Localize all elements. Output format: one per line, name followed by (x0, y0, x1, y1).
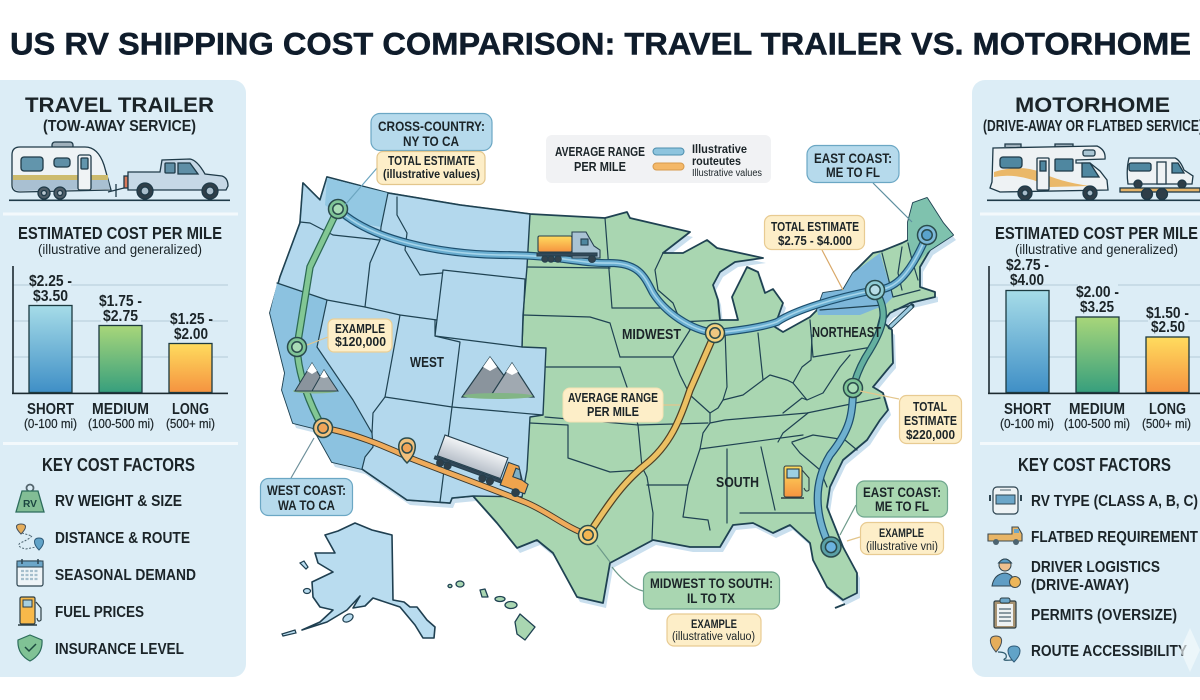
callout: midwest to south (597, 545, 780, 646)
callout: average range per mile: PER MILE (587, 405, 639, 419)
map: Florida keys (835, 604, 845, 608)
heading: estimated cost per mile: (illustrative and generalized) (38, 241, 202, 257)
heading: key cost factors: KEY COST FACTORS (1018, 455, 1171, 475)
callout: midwest to south: MIDWEST TO SOUTH: (650, 575, 773, 591)
label: NORTHEAST: NORTHEAST (812, 324, 881, 341)
bar chart: motorhome cost per mile: (0-100 mi) (1000, 417, 1054, 431)
bar chart: motorhome cost per mile: $2.50 (1151, 319, 1185, 336)
map: land fill midwest south northeast (270, 177, 953, 603)
bar chart: motorhome cost per mile (988, 257, 1200, 431)
callout: east coast south: EXAMPLE (879, 528, 924, 540)
callout: example 120,000: $120,000 (335, 334, 386, 349)
map: Alaska (302, 523, 435, 638)
callout: total estimate 220,000: TOTAL (913, 400, 947, 414)
bar chart: trailer cost per mile: (100-500 mi) (88, 417, 154, 431)
callout: cross-country: CROSS-COUNTRY: (378, 118, 485, 134)
callout: total estimate 220,000: ESTIMATE (904, 414, 957, 428)
map: New York highlight (817, 253, 893, 315)
map: Maine highlight (908, 198, 953, 260)
panel: motorhome (972, 80, 1200, 677)
bar chart: trailer cost per mile: LONG (172, 401, 209, 418)
bar chart: trailer cost per mile: (500+ mi) (166, 417, 215, 431)
bar chart: motorhome cost per mile: $1.50 - (1146, 305, 1189, 322)
map: California highlight (270, 283, 373, 469)
callout: total estimate 220,000: $220,000 (906, 428, 955, 442)
bar chart: trailer cost per mile: SHORT (27, 401, 74, 418)
callout: total estimate per mile: $2.75 - $4.000 (778, 234, 852, 248)
heading: motorhome (983, 94, 1200, 135)
legend: AVERAGE RANGE (555, 145, 645, 159)
icon: mountains west (462, 357, 534, 399)
legend: Illustrative values (692, 168, 762, 179)
callout: midwest to south: (illustrative valuo) (672, 631, 755, 643)
factor: fuel prices: FUEL PRICES (55, 604, 144, 621)
route nodes (288, 200, 936, 557)
callout: example 120,000 (307, 319, 392, 352)
factor: distance and route (16, 524, 190, 550)
title: US RV SHIPPING COST COMPARISON: TRAVEL TRAILER VS. MOTORHOME (10, 26, 1191, 62)
bar chart: motorhome cost per mile: $3.25 (1080, 299, 1114, 316)
icon: tanker truck on northern route (537, 232, 600, 262)
bar chart: motorhome cost per mile: MEDIUM (1069, 401, 1125, 418)
legend (546, 135, 771, 183)
bar chart: trailer cost per mile (12, 266, 228, 431)
icon: trailer towed by pickup (12, 142, 228, 199)
icon: fuel pump on map (781, 466, 809, 498)
icon: motorhome and van on flatbed (990, 144, 1200, 200)
map shadow (273, 182, 956, 608)
callout: east coast south: (illustrative vni) (866, 541, 938, 553)
factor: driver logistics: (DRIVE-AWAY) (1031, 577, 1129, 594)
callout: cross-country: NY TO CA (403, 133, 459, 149)
callout: west coast: WEST COAST: (267, 482, 346, 498)
heading: key cost factors: KEY COST FACTORS (42, 455, 195, 475)
callout: cross-country (345, 114, 492, 205)
legend: PER MILE (574, 160, 626, 174)
label: WEST: WEST (410, 354, 444, 371)
bar chart: motorhome cost per mile: (100-500 mi) (1064, 417, 1130, 431)
callout: east coast south: EAST COAST: (863, 484, 941, 500)
bar chart: motorhome cost per mile: (500+ mi) (1142, 417, 1191, 431)
callout: cross-country: (illustrative values) (383, 167, 480, 181)
factor: insurance level (18, 635, 184, 661)
callout: total estimate per mile (764, 216, 864, 290)
callout: midwest to south: EXAMPLE (691, 619, 737, 631)
callout: total estimate per mile: TOTAL ESTIMATE (771, 220, 859, 234)
callout: west coast: WA TO CA (278, 497, 335, 513)
map: Hawaii (448, 581, 535, 640)
heading: estimated cost per mile: ESTIMATED COST PER MILE (18, 223, 222, 243)
heading: travel trailer: TRAVEL TRAILER (25, 94, 214, 117)
legend: routeutes (692, 154, 741, 168)
route: southern orange (323, 428, 588, 535)
bar chart: trailer cost per mile: $2.25 - (29, 273, 72, 290)
callout: east coast south (840, 481, 948, 554)
icon: mountains west coast (293, 363, 338, 394)
route: cross-country blue (338, 209, 927, 333)
label: SOUTH: SOUTH (716, 474, 759, 491)
callout: cross-country: TOTAL ESTIMATE (388, 154, 475, 168)
bar chart: trailer cost per mile: $2.00 (174, 326, 208, 343)
bar chart: trailer cost per mile: MEDIUM (92, 401, 149, 418)
bar chart: trailer cost per mile: (0-100 mi) (24, 417, 77, 431)
factor: permits (994, 598, 1177, 628)
factor: rv weight and size: RV WEIGHT & SIZE (55, 493, 182, 510)
factor: distance and route: DISTANCE & ROUTE (55, 530, 190, 547)
callout: average range per mile: AVERAGE RANGE (568, 391, 658, 405)
bar chart: motorhome cost per mile: $2.75 - (1006, 257, 1049, 274)
factor: fuel prices (18, 597, 144, 625)
factor: seasonal demand (17, 559, 196, 586)
bar chart: trailer cost per mile: $1.75 - (99, 293, 142, 310)
panel: travel trailer (0, 80, 246, 677)
callout: west coast (260, 438, 352, 516)
route: Illinois to Texas yellow (588, 333, 715, 535)
label: MIDWEST: MIDWEST (622, 326, 681, 343)
heading: travel trailer (25, 94, 214, 135)
map: United States (270, 177, 956, 640)
heading: travel trailer: (TOW-AWAY SERVICE) (43, 118, 196, 135)
factor: insurance level: INSURANCE LEVEL (55, 641, 184, 658)
map: Washington highlight (325, 178, 388, 227)
callout: example 120,000: EXAMPLE (335, 321, 385, 336)
heading: motorhome: MOTORHOME (1015, 94, 1170, 117)
factor: route accessibility (990, 636, 1187, 662)
bar chart: trailer cost per mile: $2.75 (103, 308, 138, 325)
route: west coast green (297, 209, 338, 428)
callout: east coast north (807, 146, 912, 222)
callout: east coast south: ME TO FL (875, 498, 929, 514)
map: Long Island (890, 306, 912, 327)
callout: east coast north: EAST COAST: (814, 150, 892, 166)
bar chart: trailer cost per mile: $3.50 (33, 288, 68, 305)
map: Alaska islands (282, 561, 355, 636)
legend: Illustrative (692, 142, 747, 156)
bar chart: motorhome cost per mile: $2.00 - (1076, 284, 1119, 301)
callout: east coast north: ME TO FL (826, 164, 880, 180)
heading: estimated cost per mile (995, 223, 1198, 257)
factor: permits: PERMITS (OVERSIZE) (1031, 607, 1177, 624)
bar chart: motorhome cost per mile: $4.00 (1010, 272, 1044, 289)
bar chart: motorhome cost per mile: LONG (1149, 401, 1186, 418)
bar chart: motorhome cost per mile: SHORT (1004, 401, 1051, 418)
icon: semi truck on southern route (432, 434, 534, 499)
route: east coast (818, 290, 883, 547)
factor: rv weight and size: RV (23, 499, 37, 510)
bar chart: trailer cost per mile: $1.25 - (170, 311, 213, 328)
callout: average range per mile (563, 388, 680, 422)
map: state borders (277, 193, 920, 540)
heading: estimated cost per mile: (illustrative and generalized) (1015, 241, 1178, 257)
callout: midwest to south: IL TO TX (687, 590, 736, 606)
callout: total estimate 220,000 (860, 391, 962, 444)
heading: estimated cost per mile (18, 223, 222, 257)
factor: driver logistics (992, 559, 1160, 594)
factor: rv weight and size (16, 484, 182, 512)
map: west region (270, 177, 546, 503)
factor: driver logistics: DRIVER LOGISTICS (1031, 559, 1160, 576)
factor: rv type (990, 487, 1198, 514)
factor: seasonal demand: SEASONAL DEMAND (55, 567, 196, 584)
